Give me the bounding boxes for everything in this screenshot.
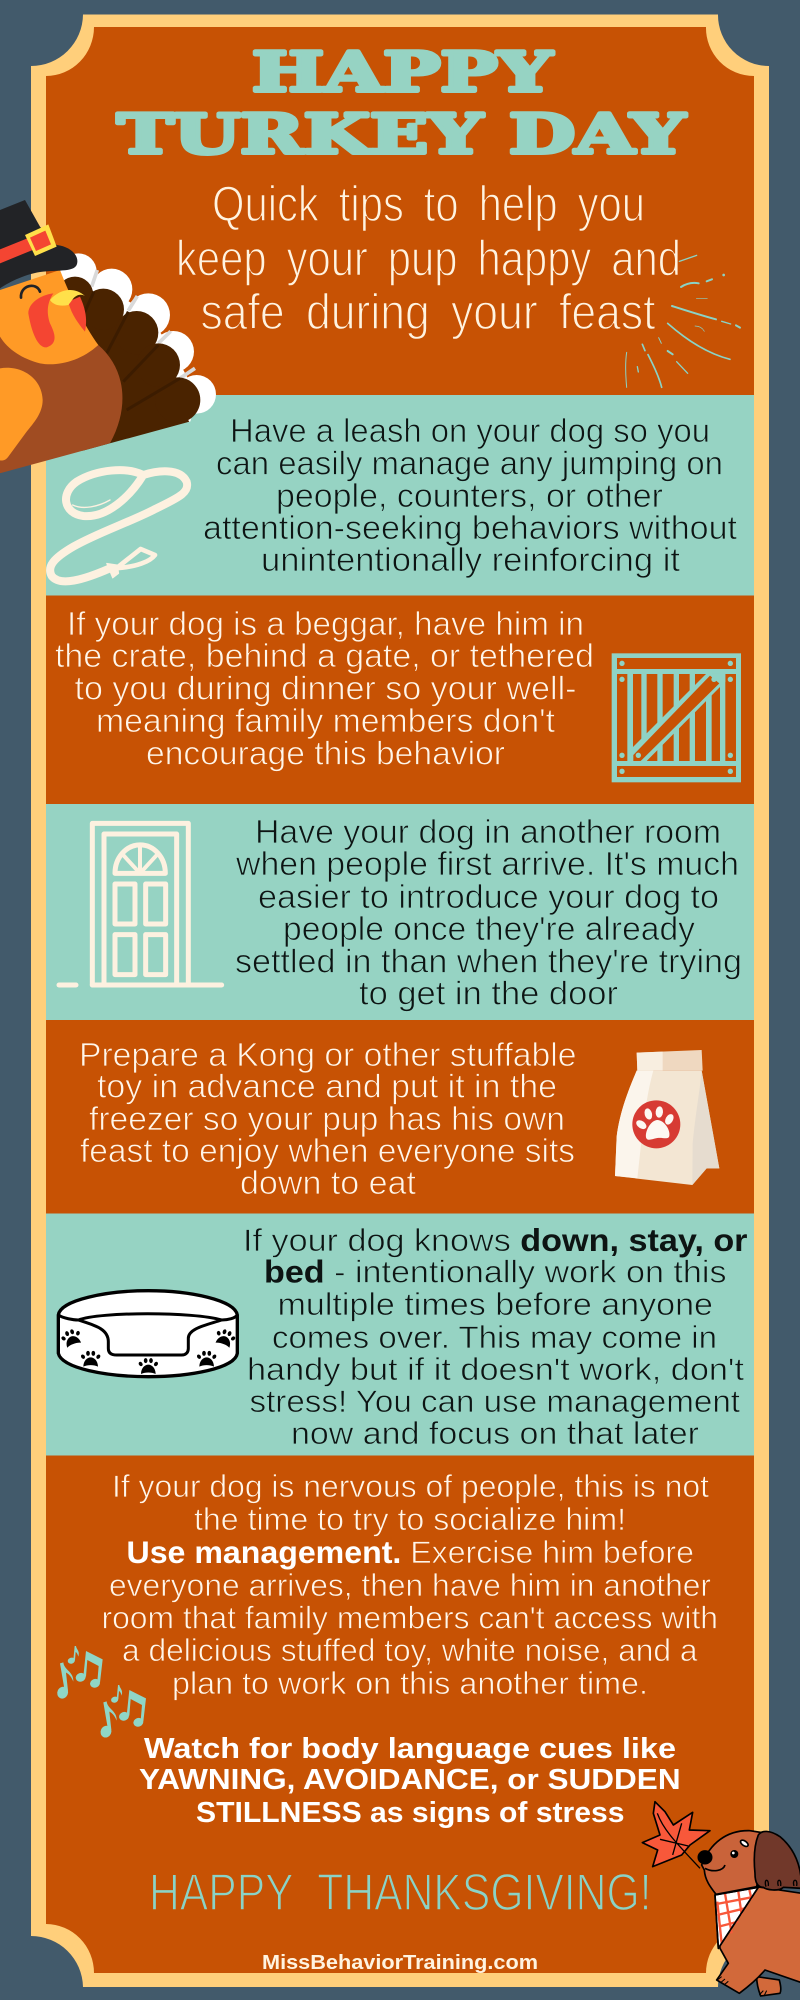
tip text: bed: comes over. This may come in bbox=[272, 1319, 717, 1355]
subtitle: safe during your feast bbox=[200, 284, 656, 340]
toes bbox=[717, 1977, 767, 1996]
autumn leaf bbox=[642, 1802, 710, 1868]
tip text: beggar: meaning family members don't bbox=[96, 702, 555, 739]
tip text: kong: freezer so your pup has his own bbox=[89, 1100, 565, 1137]
tip text: bed: bed - intentionally work on this bbox=[264, 1254, 726, 1290]
bandana bbox=[715, 1887, 758, 1948]
tip text: leash: unintentionally reinforcing it bbox=[261, 541, 680, 578]
website: MissBehaviorTraining.com bbox=[262, 1952, 538, 1974]
tip text: door: people once they're already bbox=[283, 910, 695, 947]
panel: leash tip bbox=[46, 395, 754, 596]
icon: sparkle burst bbox=[626, 255, 740, 387]
tip text: bed: If your dog knows down, stay, or bbox=[243, 1222, 748, 1258]
tip text: beggar: If your dog is a beggar, have him in bbox=[67, 605, 584, 642]
tip text: kong: Prepare a Kong or other stuffable bbox=[79, 1036, 576, 1073]
ear curls bbox=[765, 1880, 797, 1887]
face bbox=[698, 1839, 749, 1871]
tip text: kong: feast to enjoy when everyone sits bbox=[80, 1132, 575, 1169]
tip text: nervous dog: plan to work on this another time. bbox=[172, 1665, 648, 1701]
back leg bbox=[757, 1977, 781, 1996]
panel: door tip bbox=[46, 804, 754, 1020]
tip text: leash: can easily manage any jumping on bbox=[216, 444, 723, 482]
title: TURKEY DAY bbox=[117, 102, 687, 166]
body language callout bbox=[139, 1733, 681, 1829]
body language callout: Watch for body language cues like bbox=[144, 1733, 676, 1765]
tip text: bed: handy but if it doesn't work, don't bbox=[247, 1351, 744, 1387]
tip text: nervous dog: everyone arrives, then have him in another bbox=[109, 1567, 711, 1603]
tip text: bed: stress! You can use management bbox=[250, 1383, 740, 1419]
tip text: door: easier to introduce your dog to bbox=[258, 878, 719, 915]
tip text: bed bbox=[243, 1222, 748, 1451]
tip text: leash: attention-seeking behaviors without bbox=[203, 509, 737, 546]
tip text: beggar: encourage this behavior bbox=[146, 734, 505, 772]
panel: kong tip bbox=[46, 1020, 754, 1214]
tip text: leash bbox=[203, 412, 737, 578]
panel: beggar tip bbox=[46, 596, 754, 804]
tip text: door: settled in than when they're trying bbox=[235, 943, 742, 980]
tip text: bed: multiple times before anyone bbox=[278, 1286, 713, 1322]
subtitle bbox=[176, 176, 681, 340]
icon: dog bed bbox=[58, 1291, 238, 1377]
panel: bed tip bbox=[46, 1214, 754, 1456]
tip text: nervous dog bbox=[102, 1468, 718, 1701]
icon: music notes bbox=[55, 1646, 146, 1739]
tip text: kong: down to eat bbox=[240, 1164, 416, 1201]
tip text: beggar: to you during dinner so your well- bbox=[74, 670, 576, 707]
tip text: beggar bbox=[55, 605, 594, 772]
subtitle: Quick tips to help you bbox=[212, 176, 645, 232]
tip text: leash: people, counters, or other bbox=[276, 477, 663, 514]
tip text: nervous dog: the time to try to socialize him! bbox=[194, 1501, 626, 1537]
tip text: door bbox=[235, 813, 742, 1012]
tip text: leash: Have a leash on your dog so you bbox=[230, 412, 710, 449]
tip text: beggar: the crate, behind a gate, or tethered bbox=[55, 637, 594, 674]
tip text: nervous dog: If your dog is nervous of people, this is not bbox=[112, 1468, 709, 1504]
head bbox=[702, 1831, 767, 1894]
tip text: nervous dog: Use management. Exercise him before bbox=[126, 1534, 694, 1570]
tip text: door: Have your dog in another room bbox=[255, 813, 721, 850]
tip text: door: to get in the door bbox=[359, 974, 618, 1012]
illustration: dog with leaf bbox=[642, 1802, 800, 1996]
tip text: kong: toy in advance and put it in the bbox=[97, 1068, 557, 1104]
tip text: door: when people first arrive. It's much bbox=[235, 845, 739, 882]
body language callout: YAWNING, AVOIDANCE, or SUDDEN bbox=[139, 1764, 681, 1796]
ear bbox=[754, 1831, 800, 1890]
closing greeting: HAPPY THANKSGIVING! bbox=[149, 1864, 652, 1922]
tip text: bed: now and focus on that later bbox=[291, 1415, 699, 1451]
icon: treat bag bbox=[615, 1050, 719, 1185]
tip text: kong bbox=[79, 1036, 576, 1201]
title: HAPPY bbox=[252, 40, 554, 104]
icon: door bbox=[59, 823, 222, 985]
icon: crate bbox=[612, 653, 741, 782]
illustration: turkey bbox=[0, 200, 216, 477]
tip text: nervous dog: a delicious stuffed toy, white noise, and a bbox=[122, 1632, 698, 1668]
title bbox=[117, 40, 687, 166]
tip text: nervous dog: room that family members can't access with bbox=[102, 1600, 718, 1636]
subtitle: keep your pup happy and bbox=[176, 230, 681, 286]
body bbox=[716, 1887, 800, 1993]
icon: leash bbox=[50, 470, 187, 581]
body language callout: STILLNESS as signs of stress bbox=[196, 1797, 624, 1829]
